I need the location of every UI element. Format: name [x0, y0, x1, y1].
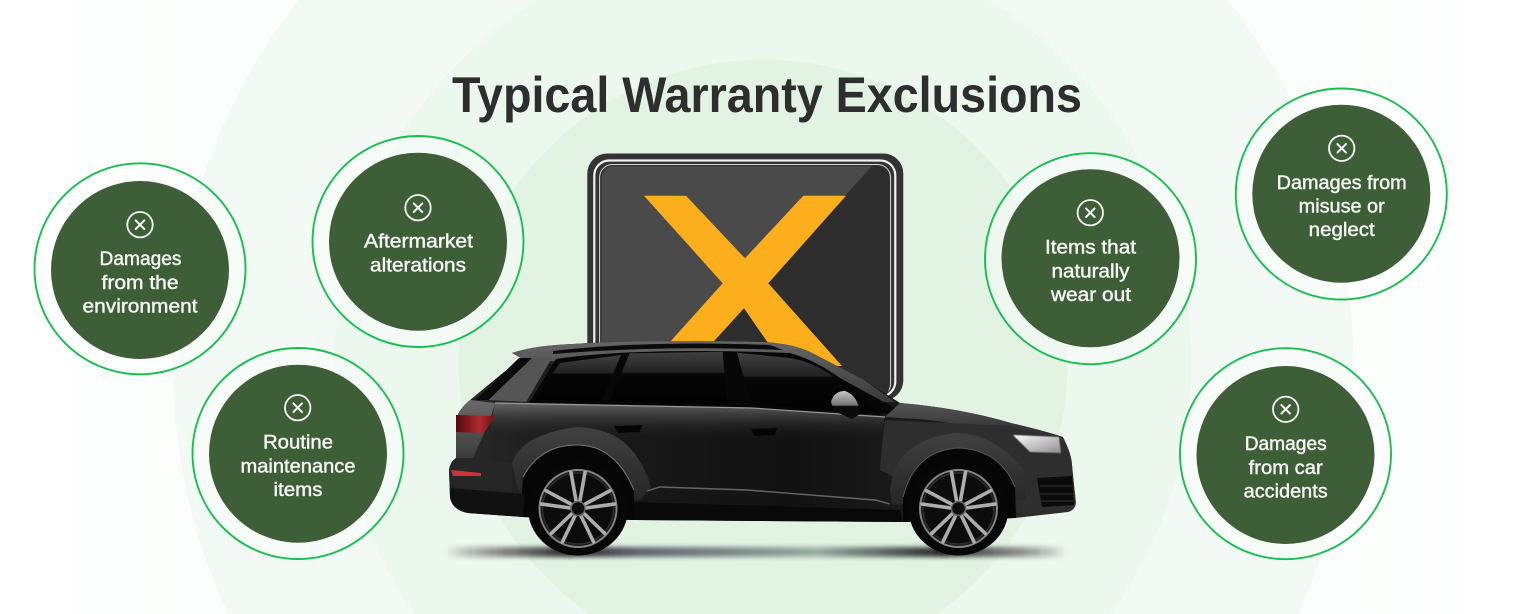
label text [1244, 433, 1328, 502]
rear arch highlight [523, 445, 634, 490]
sign plate [587, 154, 903, 400]
rear side panel [488, 403, 885, 440]
tail light [456, 415, 495, 433]
front wheel flare [890, 433, 1026, 505]
rear bumper [449, 458, 512, 516]
rear wheel arch [520, 445, 634, 520]
rear wheel flare [512, 427, 651, 500]
side glass: rear quarter [534, 355, 621, 402]
callout: damages from car accidents [1180, 348, 1391, 559]
door handle front [751, 428, 777, 436]
callout: items that naturally wear out [985, 153, 1196, 364]
side glass: front [737, 353, 879, 413]
label text: maintenance [240, 455, 356, 477]
warning sign with X [587, 154, 903, 406]
icon: x in circle [1329, 136, 1354, 161]
door handle rear [614, 425, 642, 433]
label text: Damages [100, 248, 182, 270]
ground shadow [445, 547, 1067, 557]
label text: environment [82, 296, 198, 318]
sign inner white line [600, 164, 891, 396]
sill chrome line [647, 487, 890, 504]
rear quarter panel [456, 400, 495, 458]
car body [449, 341, 1076, 522]
label text: Routine [263, 431, 333, 453]
car [445, 341, 1076, 557]
roof [512, 341, 895, 402]
front grille [1037, 476, 1074, 507]
callout: damages from the environment [34, 163, 246, 374]
label text [240, 431, 356, 501]
label text: Damages from [1277, 172, 1407, 194]
icon: x in circle [405, 195, 431, 220]
front arch highlight [903, 448, 1015, 497]
label text: Aftermarket [364, 231, 474, 253]
title: Typical Warranty Exclusions [452, 67, 1082, 123]
hood [885, 403, 1063, 437]
icon: x in circle [127, 212, 153, 237]
front fender and bumper [880, 420, 1075, 514]
icon: x in circle [1078, 200, 1103, 225]
window surround [529, 351, 900, 415]
belt highlight line [495, 403, 885, 417]
lower sill [634, 502, 902, 522]
front wheel arch [903, 448, 1016, 522]
label text: alterations [370, 255, 466, 277]
label text: items [274, 479, 323, 501]
icon: x in circle [285, 395, 310, 420]
label text: wear out [1050, 284, 1132, 306]
label text: misuse or [1299, 196, 1385, 218]
headlight [1013, 435, 1061, 453]
label text: Damages [1245, 433, 1327, 455]
label text [82, 248, 198, 318]
rear pillar panel [488, 358, 552, 402]
callout: routine maintenance items [192, 348, 404, 559]
orange X mark [644, 196, 846, 366]
callout: aftermarket alterations [312, 136, 524, 347]
rear window [476, 358, 532, 400]
rear bumper lower [450, 488, 525, 517]
side mirror [831, 391, 860, 419]
rear reflector [451, 470, 481, 476]
icon: x in circle [1273, 397, 1298, 422]
label text: neglect [1309, 219, 1375, 241]
label text [364, 231, 474, 277]
label text [1277, 172, 1407, 241]
label text: naturally [1052, 260, 1130, 282]
label text: accidents [1244, 480, 1328, 502]
label text: Items that [1045, 236, 1137, 258]
label text [1045, 236, 1137, 306]
side glass: middle [610, 352, 727, 405]
sign outer white line [594, 160, 895, 396]
label text: from car [1249, 457, 1323, 479]
callout: damages from misuse or neglect [1236, 88, 1447, 300]
front wheel [908, 462, 1008, 556]
label text: from the [102, 272, 178, 294]
sign panel face [602, 166, 889, 406]
roof rail [553, 343, 783, 354]
rear wheel [528, 462, 628, 556]
